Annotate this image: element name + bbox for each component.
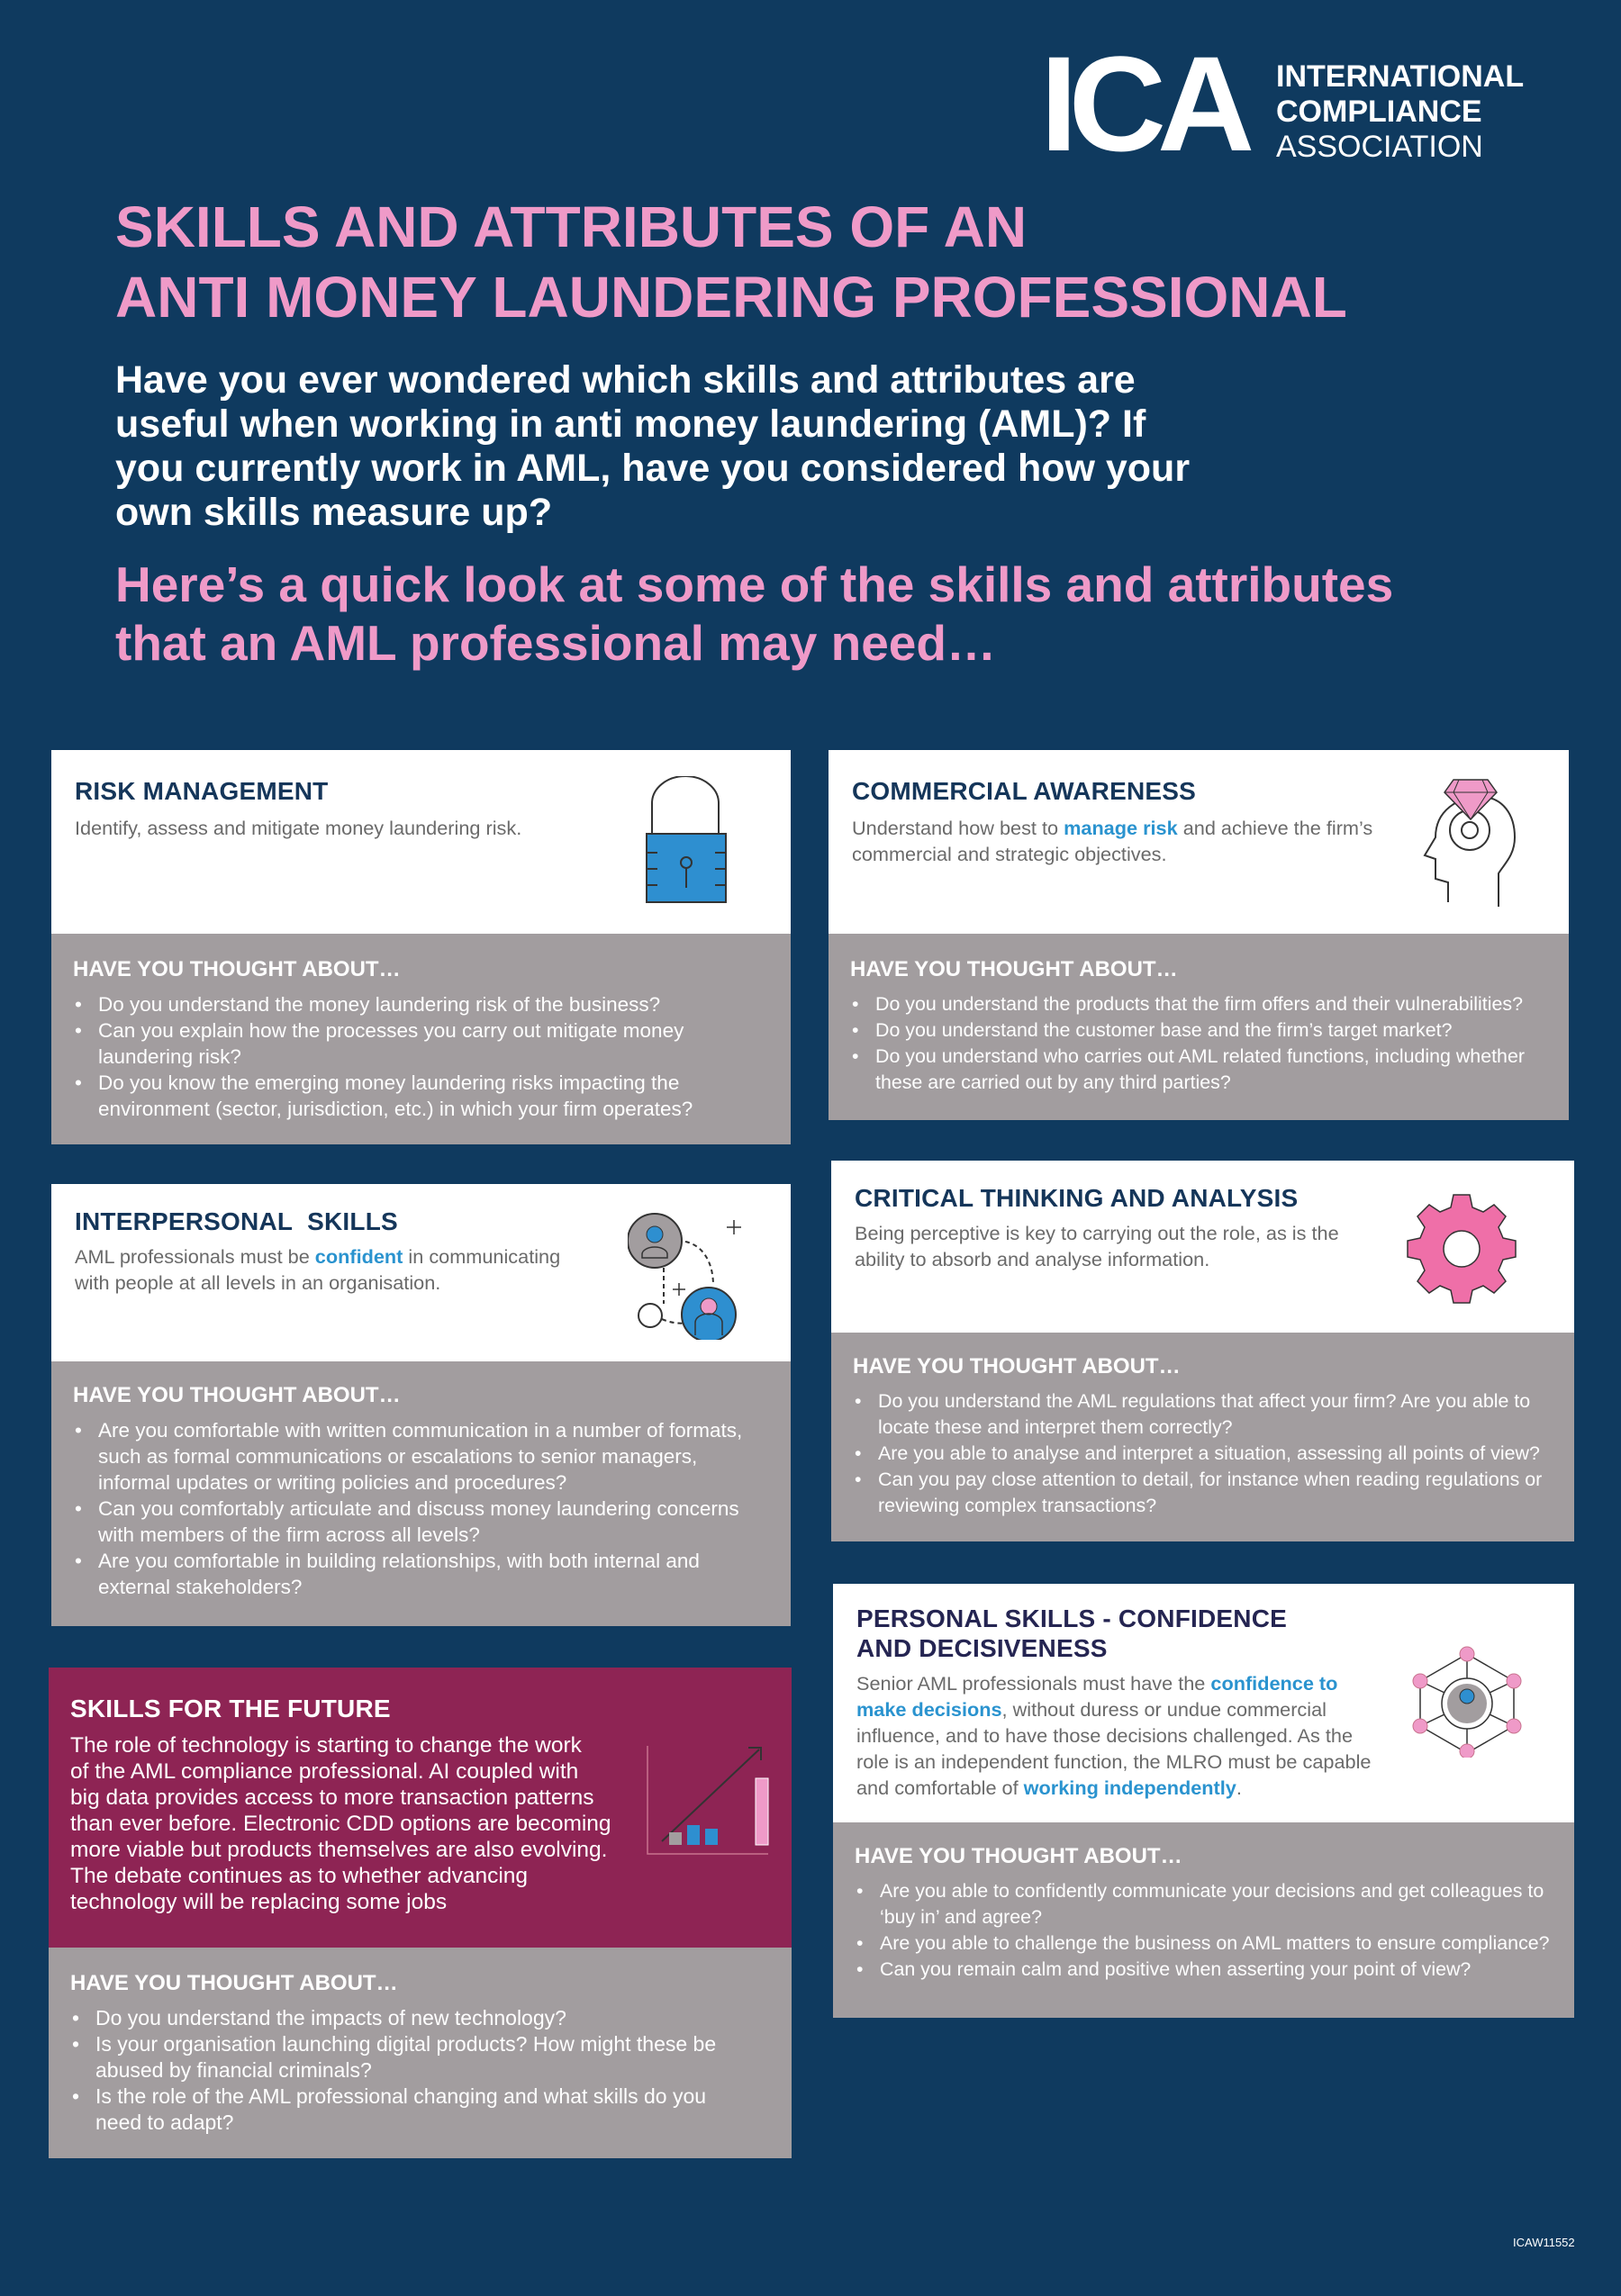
description: [855, 1222, 1339, 1270]
icon: people connection: [628, 1213, 741, 1340]
heading: personal skills: [856, 1604, 1287, 1662]
panel: risk management: Can you explain how the processes you carry out mitigate money laundering risk?: [98, 1019, 684, 1068]
checklist: skills for the future: HAVE YOU THOUGHT ABOUT…: [70, 1971, 398, 1995]
checklist: personal skills: HAVE YOU THOUGHT ABOUT…: [855, 1844, 1182, 1868]
description: make decisions, without duress or undue commercial: [856, 1698, 1327, 1721]
checklist: risk management: HAVE YOU THOUGHT ABOUT…: [73, 957, 401, 981]
panel: interpersonal skills: Are you comfortable in building relationships, with both internal and external stakeholders?: [98, 1550, 700, 1598]
logo wordmark: ASSOCIATION: [1276, 130, 1483, 164]
description: AML professionals must be confident in communicating: [75, 1245, 560, 1268]
title: SKILLS AND ATTRIBUTES OF AN: [115, 194, 1027, 259]
description: Senior AML professionals must have the confidence to: [856, 1672, 1337, 1695]
description: and comfortable of working independently.: [856, 1776, 1242, 1799]
pink subheading: Here’s a quick look at some of the skills and attributes: [115, 556, 1393, 612]
reference code: ICAW11552: [1513, 2236, 1575, 2249]
icon: padlock: [646, 776, 727, 903]
panel: commercial awareness: [829, 750, 1569, 1120]
intro text: Have you ever wondered which skills and attributes are: [115, 358, 1136, 402]
panel: critical thinking and analysis: Are you able to analyse and interpret a situation, assessing all points of view?: [878, 1442, 1540, 1464]
intro text: you currently work in AML, have you considered how your: [115, 447, 1190, 490]
logo wordmark: INTERNATIONAL: [1276, 59, 1524, 94]
description: with people at all levels in an organisation.: [75, 1271, 440, 1294]
panel: interpersonal skills: Are you comfortable with written communication in a number of formats, such as formal communications or escalations to senior managers, informal updates or writing policies and procedures?: [98, 1419, 742, 1494]
description: [856, 1672, 1371, 1799]
description: ability to absorb and analyse information.: [855, 1248, 1209, 1270]
checklist: interpersonal skills: HAVE YOU THOUGHT ABOUT…: [73, 1383, 401, 1407]
logo wordmark: [1276, 59, 1524, 164]
heading: skills for the future: SKILLS FOR THE FUTURE: [70, 1695, 391, 1722]
panel: personal skills: Are you able to confidently communicate your decisions and get colleagues to ‘buy in’ and agree?: [880, 1880, 1544, 1928]
description: than ever before. Electronic CDD options are becoming: [70, 1812, 611, 1836]
logo mark ICA: ICA: [1040, 28, 1245, 179]
icon: network: [1412, 1646, 1522, 1758]
description: Identify, assess and mitigate money laundering risk.: [75, 817, 521, 839]
description: The debate continues as to whether advancing: [70, 1864, 528, 1888]
description: The role of technology is starting to change the work: [70, 1733, 582, 1758]
logo wordmark: COMPLIANCE: [1276, 95, 1482, 129]
description: [852, 817, 1372, 865]
panel: interpersonal skills: [51, 1184, 791, 1626]
panel: interpersonal skills: Can you comfortably articulate and discuss money laundering concerns with members of the firm across all levels?: [98, 1497, 739, 1546]
panel: risk management: Do you know the emerging money laundering risks impacting the environment (sector, jurisdiction, etc.) in which your firm operates?: [98, 1071, 693, 1120]
description: commercial and strategic objectives.: [852, 843, 1167, 865]
panel: personal skills: Can you remain calm and positive when asserting your point of view?: [880, 1958, 1471, 1980]
intro text: own skills measure up?: [115, 491, 552, 534]
heading: interpersonal skills: INTERPERSONAL SKILLS: [75, 1207, 398, 1235]
panel: critical thinking and analysis: Can you pay close attention to detail, for instance when reading regulations or reviewing complex transactions?: [878, 1469, 1542, 1516]
intro text: [115, 358, 1190, 534]
pink subheading: [115, 556, 1393, 671]
description: influence, and to have those decisions challenged. As the: [856, 1724, 1353, 1747]
panel: critical thinking and analysis: Do you understand the AML regulations that affect your firm? Are you able to locate these and interpret them correctly?: [878, 1390, 1530, 1438]
intro text: useful when working in anti money laundering (AML)? If: [115, 402, 1146, 446]
icon: head with diamond: [1423, 779, 1516, 907]
panel: skills for the future: Is the role of the AML professional changing and what skills do you need to adapt?: [95, 2084, 706, 2134]
panel: commercial awareness: Do you understand the customer base and the firm’s target market?: [875, 1019, 1452, 1041]
heading: commercial awareness: COMMERCIAL AWARENESS: [852, 777, 1196, 805]
description: [70, 1733, 611, 1914]
panel: personal skills: [833, 1584, 1574, 2018]
panel: skills for the future: [49, 1668, 792, 2158]
panel: skills for the future: Do you understand the impacts of new technology?: [95, 2006, 566, 2029]
panel: personal skills: Are you able to challenge the business on AML matters to ensure compliance?: [880, 1932, 1550, 1954]
heading: personal skills: AND DECISIVENESS: [856, 1634, 1108, 1662]
panel: risk management: Do you understand the money laundering risk of the business?: [98, 993, 660, 1016]
logo: [1040, 28, 1524, 179]
heading: risk management: RISK MANAGEMENT: [75, 777, 328, 805]
description: technology will be replacing some jobs: [70, 1890, 447, 1914]
description: [75, 1245, 560, 1294]
description: Being perceptive is key to carrying out the role, as is the: [855, 1222, 1339, 1244]
title: ANTI MONEY LAUNDERING PROFESSIONAL: [115, 265, 1347, 330]
panel: commercial awareness: Do you understand the products that the firm offers and their vulnerabilities?: [875, 993, 1523, 1015]
description: role is an independent function, the MLRO must be capable: [856, 1750, 1371, 1773]
panel: commercial awareness: Do you understand who carries out AML related functions, including whether these are carried out by any third parties?: [875, 1045, 1525, 1093]
description: of the AML compliance professional. AI coupled with: [70, 1759, 578, 1784]
description: more viable but products themselves are also evolving.: [70, 1838, 607, 1862]
title: [115, 194, 1347, 330]
checklist: critical thinking: HAVE YOU THOUGHT ABOUT…: [853, 1354, 1181, 1379]
panel: skills for the future: Is your organisation launching digital products? How might these be abused by financial criminals?: [95, 2032, 716, 2082]
panel: risk management: [51, 750, 791, 1144]
description: big data provides access to more transaction patterns: [70, 1785, 594, 1810]
icon: growth bar chart: [647, 1746, 769, 1855]
description: Understand how best to manage risk and achieve the firm’s: [852, 817, 1372, 839]
panel: critical thinking and analysis: [831, 1161, 1574, 1541]
heading: critical thinking: CRITICAL THINKING AND ANALYSIS: [855, 1184, 1298, 1212]
pink subheading: that an AML professional may need…: [115, 615, 996, 671]
icon: gear: [1407, 1194, 1517, 1304]
heading: personal skills: PERSONAL SKILLS - CONFIDENCE: [856, 1604, 1287, 1632]
checklist: commercial awareness: HAVE YOU THOUGHT ABOUT…: [850, 957, 1178, 981]
